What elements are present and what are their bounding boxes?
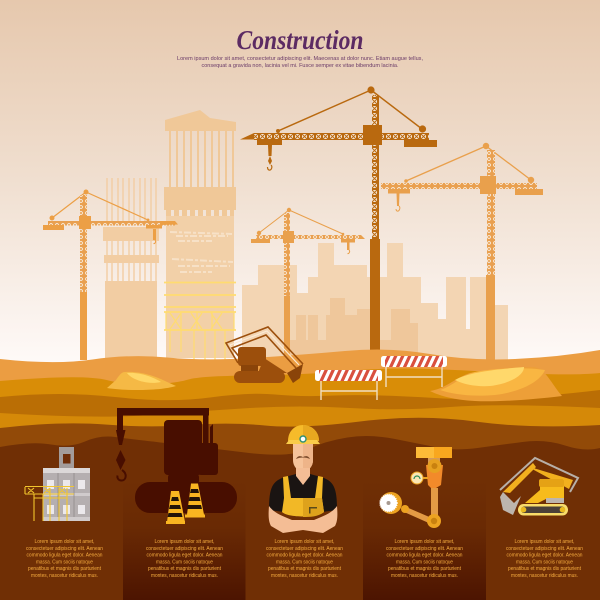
text block 1: consectetuer adipiscing elit. Aenean (26, 546, 103, 552)
text block 4: Lorem ipsum dolor sit amet, (394, 539, 455, 545)
tower crane: right (381, 143, 543, 362)
text block 4: penatibus et magnis dis parturient (388, 566, 461, 572)
second building under construction (103, 178, 159, 358)
sand pile: left (107, 372, 176, 390)
text block 3: commodo ligula eget dolor. Aenean (266, 552, 342, 558)
text block 2: Lorem ipsum dolor sit amet, (154, 539, 215, 545)
icon: construction worker (269, 425, 337, 533)
sand pile: right (430, 367, 562, 401)
text block 3: penatibus et magnis dis parturient (268, 566, 341, 572)
text block 1 (26, 539, 103, 579)
tower crane: main (240, 86, 437, 350)
ground layers (0, 350, 600, 600)
tower crane: left (43, 190, 178, 360)
title block (177, 25, 423, 69)
traffic cones (166, 484, 205, 524)
text block 2: commodo ligula eget dolor. Aenean (146, 552, 222, 558)
road barrier: front (315, 370, 382, 400)
text block 2: consectetuer adipiscing elit. Aenean (146, 546, 223, 552)
text block 3: massa. Cum sociis natoque (276, 560, 333, 566)
title block: Lorem ipsum dolor sit amet, consectetur adipiscing elit. Maecenas at dolor nunc. Etiam augue tellus, (177, 56, 423, 62)
excavator silhouette (226, 327, 303, 383)
text block 2: penatibus et magnis dis parturient (148, 566, 221, 572)
text block 5: massa. Cum sociis natoque (516, 560, 573, 566)
text block 1: massa. Cum sociis natoque (36, 560, 93, 566)
city skyline (242, 243, 508, 365)
text block 5: Lorem ipsum dolor sit amet, (514, 539, 575, 545)
text block 3: montes, nascetur ridiculus mus. (271, 573, 338, 579)
text block 1: montes, nascetur ridiculus mus. (31, 573, 98, 579)
title block: Construction (236, 25, 364, 55)
darker column: panel 4 (363, 480, 486, 600)
text blocks (26, 539, 583, 579)
icon: yellow excavator (500, 458, 578, 516)
road barrier: back (381, 356, 447, 387)
text block 1: commodo ligula eget dolor. Aenean (26, 552, 102, 558)
darker column: panel 2 (123, 480, 246, 600)
text block 2: massa. Cum sociis natoque (156, 560, 213, 566)
text block 5: penatibus et magnis dis parturient (508, 566, 581, 572)
text block 2 (146, 539, 223, 579)
text block 4: commodo ligula eget dolor. Aenean (386, 552, 462, 558)
text block 1: penatibus et magnis dis parturient (28, 566, 101, 572)
text block 5: montes, nascetur ridiculus mus. (511, 573, 578, 579)
text block 4: montes, nascetur ridiculus mus. (391, 573, 458, 579)
crane and bulldozer silhouette (116, 408, 237, 513)
text block 3: Lorem ipsum dolor sit amet, (274, 539, 335, 545)
text block 4: consectetuer adipiscing elit. Aenean (386, 546, 463, 552)
icon: building under construction (25, 447, 90, 521)
text block 5: commodo ligula eget dolor. Aenean (506, 552, 582, 558)
text block 5: consectetuer adipiscing elit. Aenean (506, 546, 583, 552)
text block 2: montes, nascetur ridiculus mus. (151, 573, 218, 579)
text block 3: consectetuer adipiscing elit. Aenean (266, 546, 343, 552)
title block: consequat a gravida non, lacinia vel mi. Fusce semper ex vitae bibendum lacinia. (202, 63, 399, 69)
text block 4 (386, 539, 463, 579)
text block 5 (506, 539, 583, 579)
text block 3 (266, 539, 343, 579)
tower crane: middle (251, 208, 365, 362)
text block 1: Lorem ipsum dolor sit amet, (34, 539, 95, 545)
icon: robotic arm with saw (380, 447, 452, 528)
text block 4: massa. Cum sociis natoque (396, 560, 453, 566)
tall building under construction (164, 110, 236, 361)
